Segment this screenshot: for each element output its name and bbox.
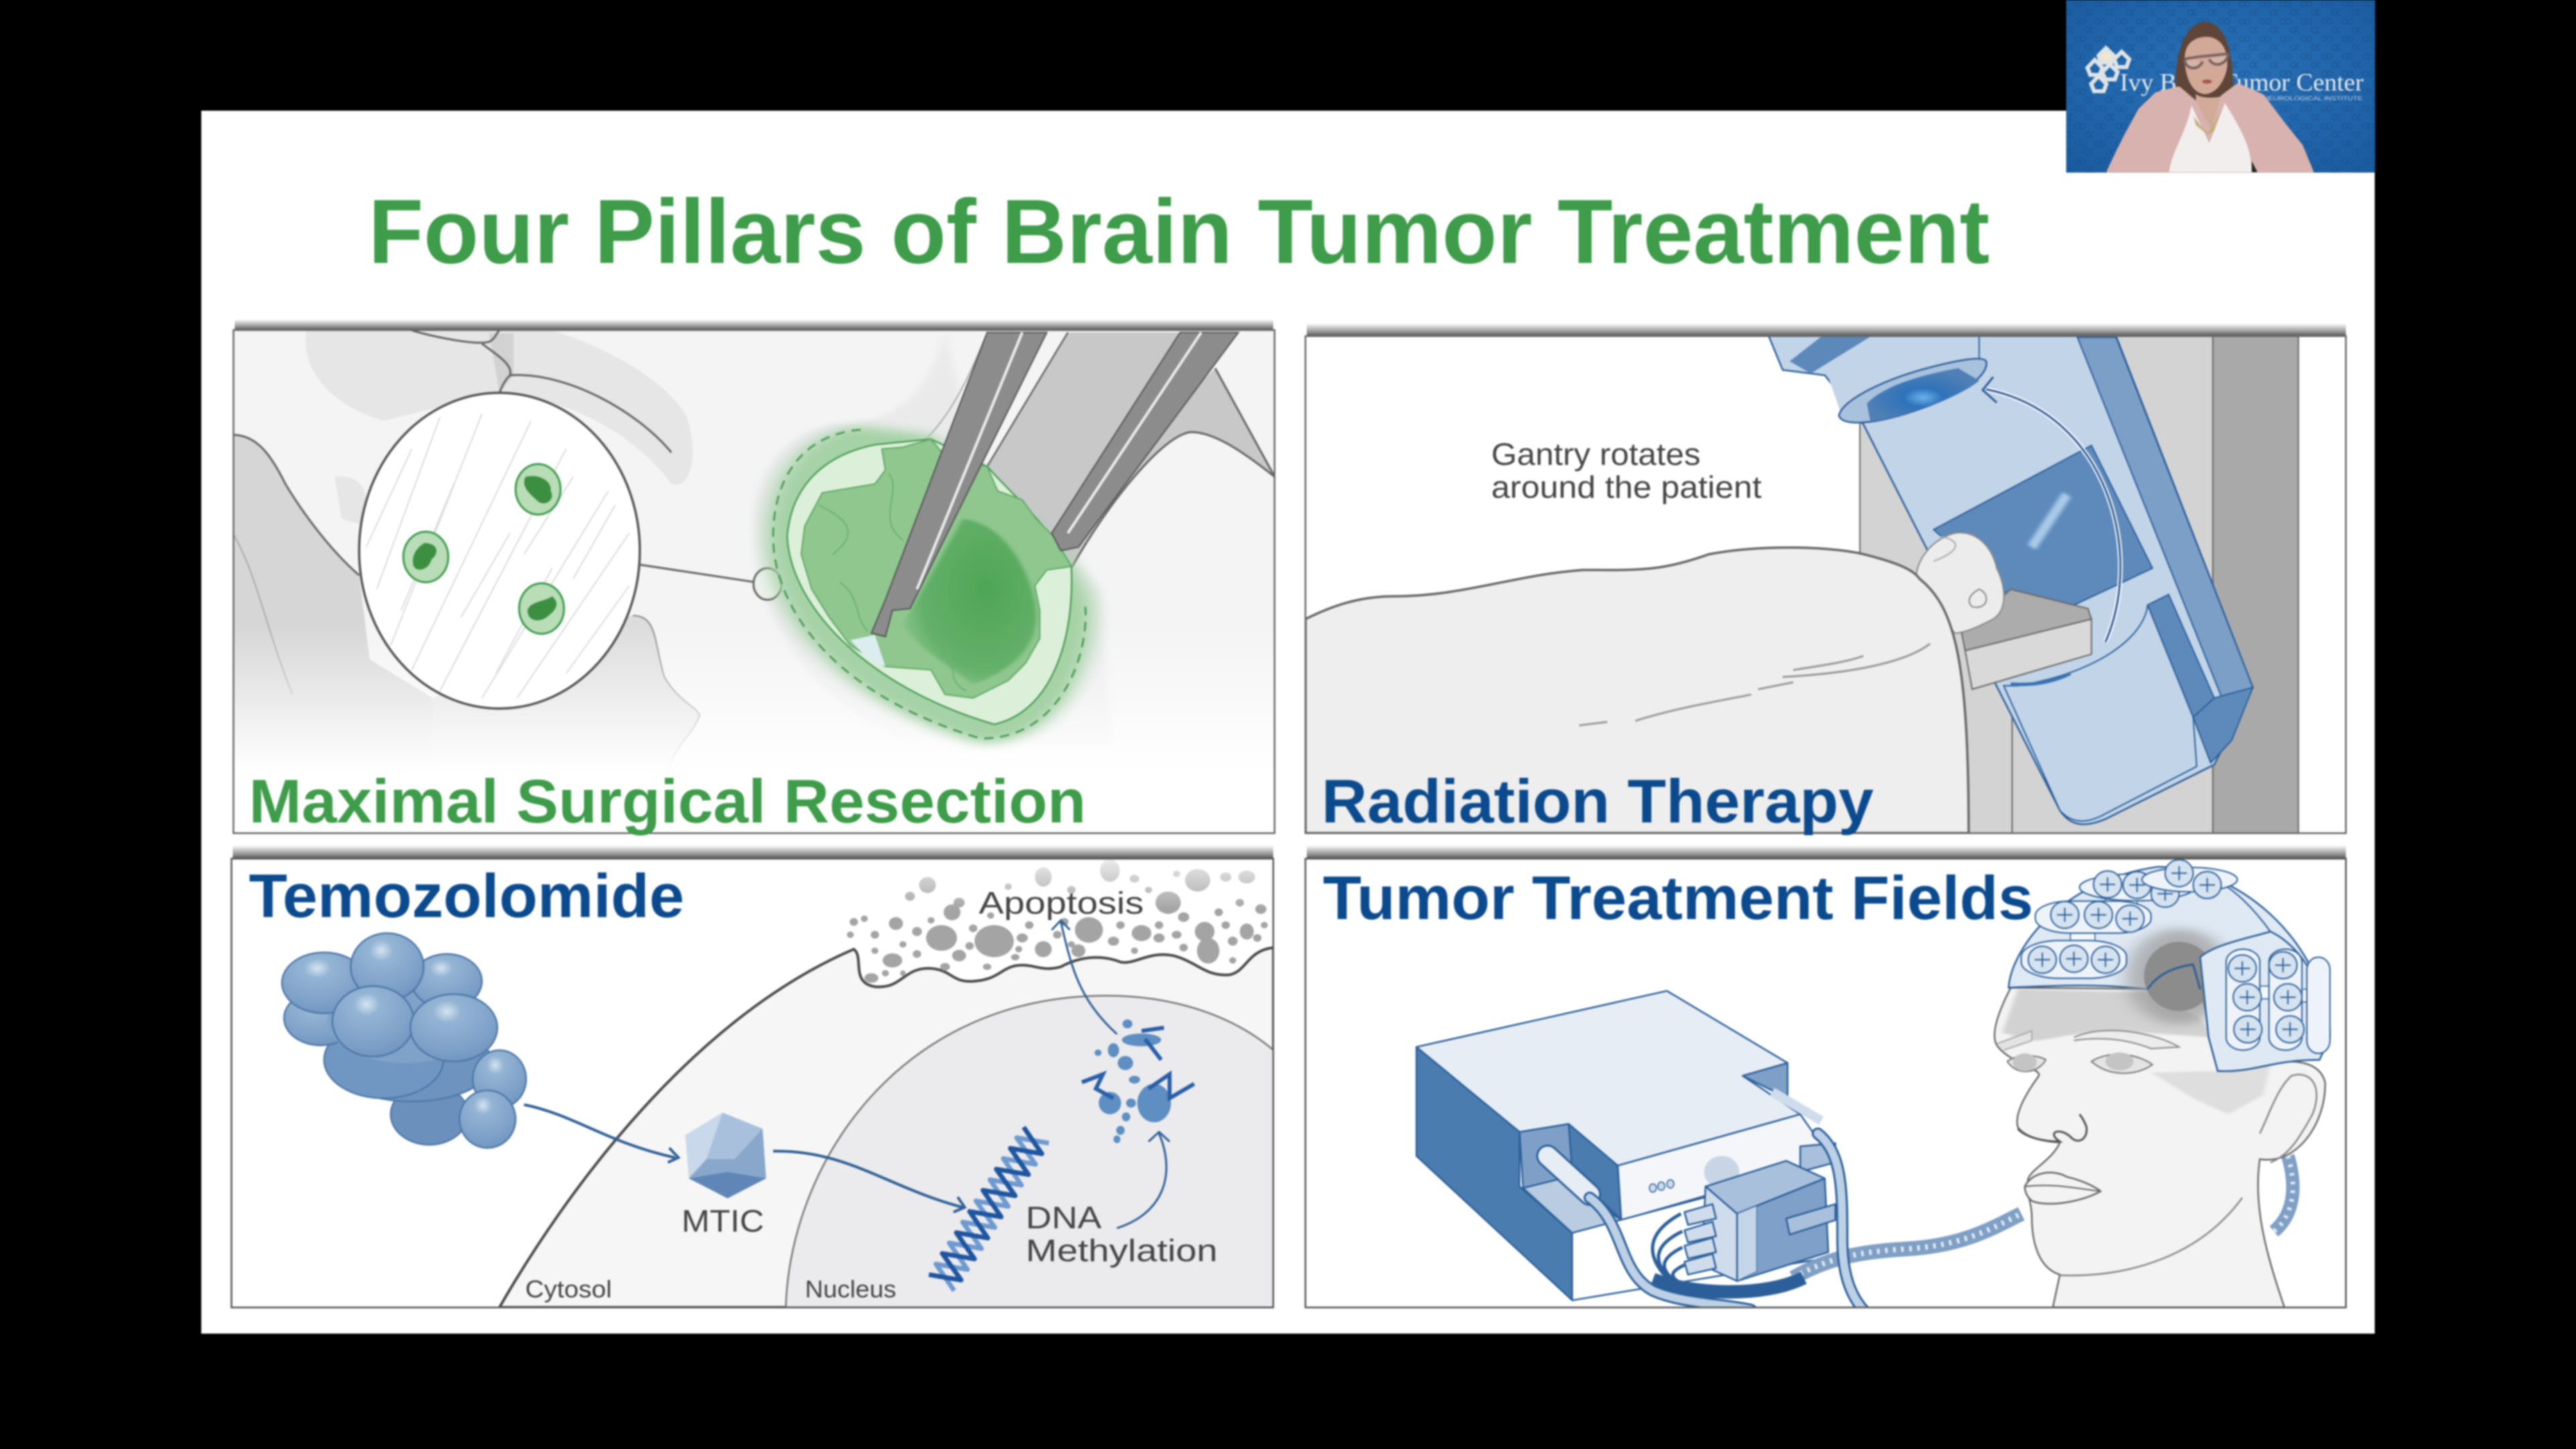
label: cytosol: Cytosol bbox=[525, 1275, 612, 1303]
head and face bbox=[1994, 987, 2325, 1307]
label: MTIC: MTIC bbox=[682, 1203, 764, 1238]
heading: radiation therapy: Radiation Therapy bbox=[1322, 767, 1874, 836]
electrode cap bbox=[2008, 860, 2330, 1071]
retractor and tissue bbox=[903, 333, 1275, 568]
gantry bbox=[1769, 336, 2253, 824]
tumor cells in tissue bbox=[403, 464, 564, 634]
panel: maximal surgical resection bbox=[233, 319, 1275, 836]
presenter bbox=[2111, 22, 2309, 172]
panel border bbox=[1305, 336, 2346, 833]
device cables bbox=[1548, 1134, 1864, 1310]
connector line bbox=[640, 565, 755, 582]
slide background bbox=[201, 111, 2375, 1334]
blanket bbox=[1305, 547, 1969, 833]
wires and bundle bbox=[1652, 1214, 1804, 1292]
electrode arrays bbox=[2021, 860, 2330, 1053]
label: apoptosis: Apoptosis bbox=[979, 885, 1144, 920]
tumor bbox=[2127, 928, 2232, 1024]
label: DNA methylation: DNA bbox=[1026, 1200, 1102, 1235]
braided cable bbox=[1793, 1214, 2021, 1278]
device indicator lights bbox=[1650, 1180, 1674, 1192]
wall bbox=[1860, 336, 2298, 833]
heading: temozolomide: Temozolomide bbox=[249, 862, 684, 930]
treatment device bbox=[1416, 991, 1842, 1300]
magnified tissue circle bbox=[359, 393, 640, 708]
icon: damaged DNA fragments bbox=[1082, 1020, 1194, 1143]
head rest bbox=[1962, 589, 2092, 689]
heading: tumor treatment fields: Tumor Treatment Fields bbox=[1323, 864, 2033, 932]
icon: MTIC hexagon bbox=[686, 1113, 766, 1198]
tumor resection cavity bbox=[766, 426, 1093, 744]
apoptosis granules bbox=[847, 859, 1268, 983]
logo hexagons bbox=[2088, 48, 2129, 91]
arrow: methylation bbox=[1117, 1132, 1169, 1228]
title: Four Pillars of Brain Tumor Treatment bbox=[368, 180, 1990, 282]
webcam presenter inset bbox=[2066, 0, 2375, 172]
cell cytosol bbox=[500, 948, 1273, 1307]
label: nucleus: Nucleus bbox=[805, 1275, 896, 1303]
connector block bbox=[1684, 1161, 1835, 1281]
panel border bbox=[233, 330, 1275, 833]
arrow: molecule to MTIC bbox=[524, 1105, 678, 1163]
icon: DNA helix bbox=[929, 1127, 1049, 1291]
panel: radiation therapy bbox=[1305, 323, 2346, 836]
callout: gantry: around the patient bbox=[1491, 470, 1762, 504]
arrow: MTIC to DNA bbox=[773, 1151, 965, 1212]
forceps bbox=[871, 333, 1238, 637]
icon: temozolomide molecule cluster bbox=[282, 933, 526, 1148]
panel border bbox=[231, 859, 1273, 1307]
braid behind neck bbox=[2274, 1156, 2293, 1232]
arrow: gantry rotation bbox=[1983, 377, 2121, 642]
webcam presenter inset: NEUROLOGICAL INSTITUTE bbox=[2263, 95, 2363, 101]
heading: maximal surgical resection: Maximal Surgical Resection bbox=[249, 767, 1086, 836]
panel border bbox=[1305, 859, 2346, 1307]
center name: Ivy Brain Tumor Center bbox=[2120, 69, 2364, 97]
label: DNA methylation: Methylation bbox=[1026, 1233, 1218, 1268]
panel: tumor treatment fields bbox=[1305, 845, 2346, 1310]
nucleus bbox=[786, 996, 1273, 1307]
callout: gantry: Gantry rotates bbox=[1491, 437, 1701, 472]
panel: temozolomide bbox=[231, 845, 1273, 1307]
arrow: to apoptosis bbox=[1052, 920, 1117, 1034]
patient head bbox=[1916, 533, 2004, 633]
